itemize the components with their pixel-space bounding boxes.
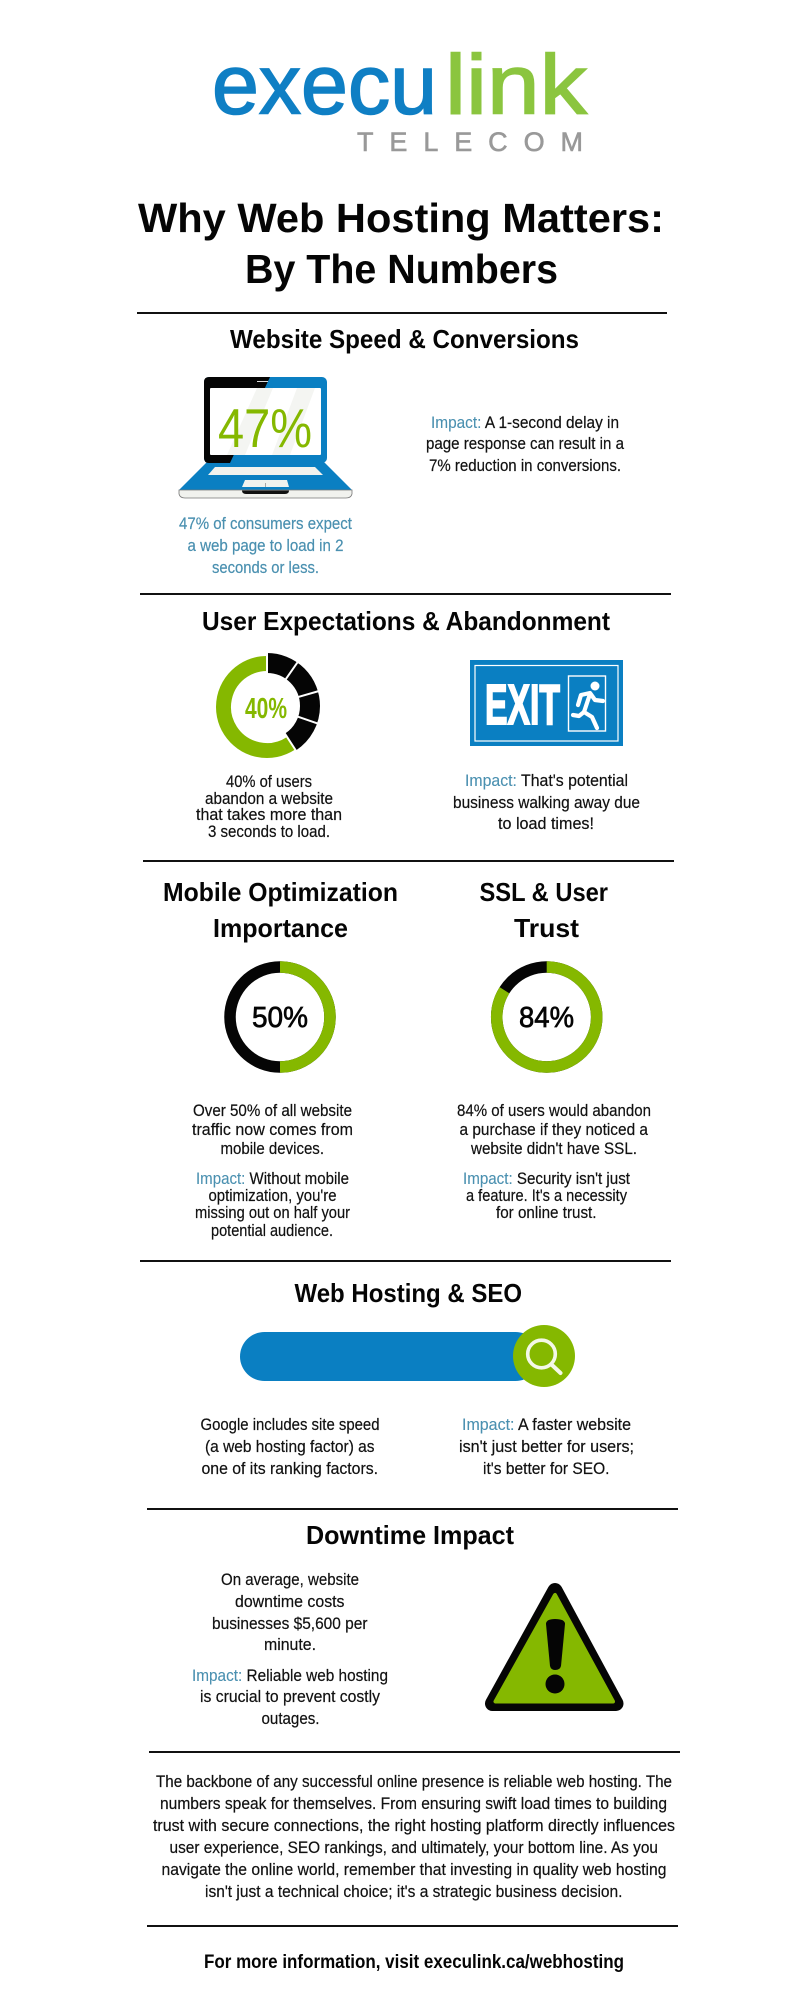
logo: execulink telecom bbox=[212, 38, 588, 157]
text: seo impact bbox=[459, 1416, 634, 1478]
heading: website speed: Website Speed & Conversions bbox=[230, 324, 579, 354]
text: mobile impact: missing out on half your bbox=[195, 1204, 350, 1222]
text: mobile traffic: mobile devices. bbox=[220, 1140, 324, 1158]
text: exit impact: Impact: That's potential bbox=[465, 772, 628, 790]
text: mobile traffic: traffic now comes from bbox=[192, 1121, 353, 1139]
heading: web hosting seo: Web Hosting & SEO bbox=[294, 1278, 522, 1308]
panel: ssl and user trust bbox=[457, 877, 651, 1222]
text: downtime impact bbox=[192, 1667, 388, 1728]
text: exit impact bbox=[453, 772, 640, 833]
text: seo impact: it's better for SEO. bbox=[483, 1460, 610, 1478]
text: impact of delay: page response can result in a bbox=[426, 435, 625, 453]
logo: execulink telecom: TELECOM bbox=[357, 127, 583, 157]
icon: search bar bbox=[240, 1325, 575, 1387]
heading: mobile optimization: Importance bbox=[213, 913, 348, 943]
text: downtime cost: On average, website bbox=[221, 1571, 359, 1589]
title bbox=[138, 195, 664, 292]
text: ssl abandonment: 84% of users would abandon bbox=[457, 1102, 651, 1120]
text: 40% of users: that takes more than bbox=[196, 806, 342, 824]
text: downtime cost: minute. bbox=[264, 1636, 316, 1654]
chart: 40% donut bbox=[207, 647, 327, 767]
text: closing paragraph: user experience, SEO rankings, and ultimately, your bottom line. As you bbox=[170, 1839, 658, 1857]
text: 40% of users: 3 seconds to load. bbox=[208, 823, 330, 841]
panel: mobile optimization importance bbox=[163, 877, 398, 1240]
panel: downtime impact bbox=[192, 1520, 616, 1728]
chart: 84% ring: 84% bbox=[519, 1002, 574, 1034]
text: closing paragraph: numbers speak for themselves. From ensuring swift load times to building bbox=[160, 1795, 667, 1813]
text: ssl abandonment bbox=[457, 1102, 651, 1158]
heading: ssl: Trust bbox=[514, 913, 579, 943]
title: By The Numbers bbox=[245, 246, 558, 292]
heading: mobile optimization bbox=[163, 877, 398, 943]
icon: exit sign bbox=[470, 660, 623, 746]
text: downtime impact: outages. bbox=[262, 1710, 320, 1728]
icon: warning triangle bbox=[492, 1590, 616, 1704]
text: mobile traffic: Over 50% of all website bbox=[193, 1102, 352, 1120]
text: ssl impact bbox=[463, 1170, 630, 1222]
text: seo impact: isn't just better for users; bbox=[459, 1438, 634, 1456]
chart: 40% donut: 40% bbox=[245, 693, 287, 725]
text: 40% of users: abandon a website bbox=[205, 790, 333, 808]
text: mobile impact: Impact: Without mobile bbox=[196, 1170, 349, 1188]
text: google ranking bbox=[200, 1416, 380, 1478]
panel: web hosting and seo bbox=[200, 1278, 634, 1478]
text: impact of delay: Impact: A 1-second delay in bbox=[431, 414, 619, 432]
text: ssl impact: for online trust. bbox=[496, 1204, 596, 1222]
logo: execulink telecom: execu bbox=[212, 38, 437, 132]
text: ssl abandonment: a purchase if they noticed a bbox=[460, 1121, 649, 1139]
text: downtime cost: downtime costs bbox=[235, 1593, 344, 1611]
text: downtime impact: Impact: Reliable web hosting bbox=[192, 1667, 388, 1685]
text: downtime impact: is crucial to prevent costly bbox=[200, 1688, 381, 1706]
caption: 47% of consumers: seconds or less. bbox=[212, 559, 319, 577]
caption: 47% of consumers: 47% of consumers expect bbox=[179, 515, 352, 533]
icon: laptop showing 47% bbox=[179, 377, 352, 498]
text: impact of delay bbox=[426, 414, 625, 475]
text: mobile impact: optimization, you're bbox=[208, 1187, 336, 1205]
text: ssl impact: a feature. It's a necessity bbox=[466, 1187, 628, 1205]
text: google ranking: one of its ranking factors. bbox=[202, 1460, 378, 1478]
text: closing paragraph: isn't just a technical choice; it's a strategic business decision. bbox=[205, 1883, 622, 1901]
icon: running figure bbox=[573, 682, 603, 728]
text: closing paragraph: The backbone of any successful online presence is reliable web hosting. The bbox=[156, 1773, 672, 1791]
text: google ranking: (a web hosting factor) as bbox=[205, 1438, 374, 1456]
heading: ssl bbox=[480, 877, 608, 943]
heading: downtime: Downtime Impact bbox=[306, 1520, 514, 1550]
icon: laptop showing 47%: 47% bbox=[218, 397, 312, 459]
chart: 84% ring bbox=[497, 967, 597, 1067]
heading: user expectations: User Expectations & Abandonment bbox=[202, 606, 610, 636]
caption: 47% of consumers bbox=[179, 515, 352, 577]
text: closing paragraph: navigate the online world, remember that investing in quality web hosting bbox=[162, 1861, 666, 1879]
heading: ssl: SSL & User bbox=[480, 877, 608, 907]
chart: 50% ring bbox=[230, 967, 330, 1067]
footer call to action: For more information, visit execulink.ca/webhosting bbox=[204, 1951, 624, 1973]
text: exit impact: to load times! bbox=[498, 815, 594, 833]
icon: exit sign: EXIT bbox=[485, 673, 560, 737]
text: mobile impact bbox=[195, 1170, 350, 1240]
text: mobile traffic bbox=[192, 1102, 353, 1158]
chart: 50% ring: 50% bbox=[252, 1002, 308, 1034]
text: 40% of users: 40% of users bbox=[226, 773, 312, 791]
title: Why Web Hosting Matters: bbox=[138, 195, 664, 241]
text: 40% of users bbox=[196, 773, 342, 841]
text: ssl impact: Impact: Security isn't just bbox=[463, 1170, 630, 1188]
heading: mobile optimization: Mobile Optimization bbox=[163, 877, 398, 907]
text: impact of delay: 7% reduction in conversions. bbox=[429, 457, 621, 475]
text: ssl abandonment: website didn't have SSL. bbox=[470, 1140, 637, 1158]
caption: 47% of consumers: a web page to load in 2 bbox=[188, 537, 344, 555]
text: mobile impact: potential audience. bbox=[211, 1222, 333, 1240]
text: downtime cost bbox=[212, 1571, 368, 1654]
panel: website speed and conversions bbox=[179, 324, 625, 577]
text: closing paragraph bbox=[153, 1773, 675, 1901]
text: seo impact: Impact: A faster website bbox=[462, 1416, 631, 1434]
panel: user expectations and abandonment bbox=[196, 606, 640, 841]
text: downtime cost: businesses $5,600 per bbox=[212, 1615, 368, 1633]
text: closing paragraph: trust with secure connections, the right hosting platform directly influences bbox=[153, 1817, 675, 1835]
text: google ranking: Google includes site speed bbox=[200, 1416, 380, 1434]
text: exit impact: business walking away due bbox=[453, 794, 640, 812]
logo: execulink telecom: link bbox=[445, 38, 588, 132]
